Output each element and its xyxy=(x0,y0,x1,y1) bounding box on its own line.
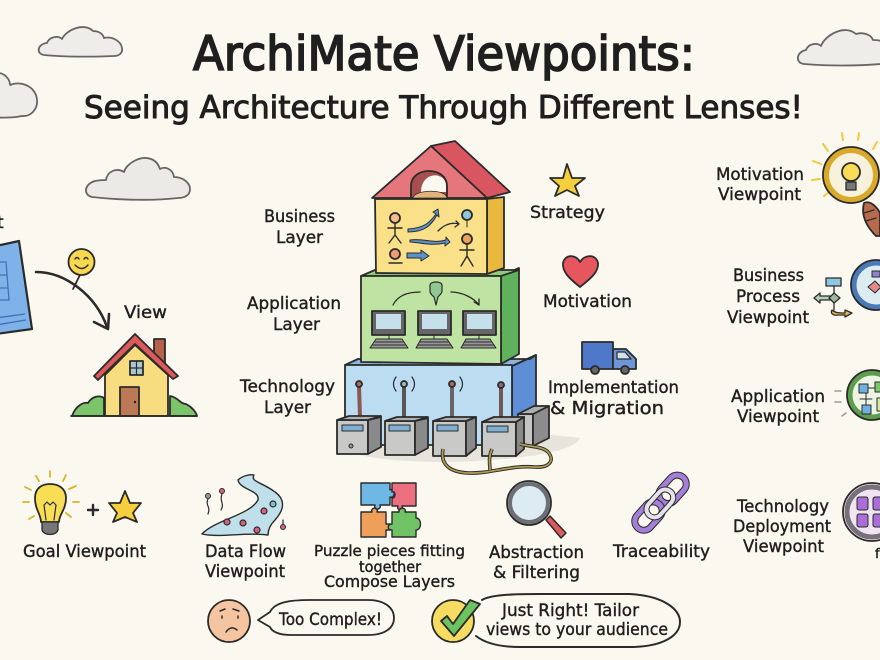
icon: blueprint xyxy=(0,241,32,334)
icon: strategy star xyxy=(550,164,585,196)
business layer diagram xyxy=(388,209,474,266)
cloud: top left xyxy=(39,27,122,57)
callout: Too Complex: Too Complex! xyxy=(278,610,382,630)
label: Technology Deployment Viewpoint: Viewpoint xyxy=(743,537,824,557)
label: Technology Layer: Technology xyxy=(239,377,335,397)
icon: check mark xyxy=(432,600,480,642)
icon: house xyxy=(71,334,197,416)
label: Technology Deployment Viewpoint: Technology xyxy=(736,497,829,517)
label: Application Layer xyxy=(247,294,341,335)
label: Puzzle pieces fitting together Compose Layers: together xyxy=(359,558,422,576)
icon: chain links xyxy=(631,471,690,534)
technology layer block xyxy=(345,355,536,445)
clipped label at right edge: f xyxy=(875,547,880,562)
roof xyxy=(372,141,510,198)
label: Implementation & Migration xyxy=(548,378,679,419)
icon: motivation lens with bulb xyxy=(812,133,880,236)
label: Business Process Viewpoint: Viewpoint xyxy=(727,308,809,328)
label: View: View xyxy=(124,303,167,323)
cloud: middle left xyxy=(86,158,190,200)
title: ArchiMate Viewpoints: xyxy=(193,27,695,82)
label: Technology Deployment Viewpoint: Deployment xyxy=(733,517,831,537)
application layer diagram xyxy=(393,282,479,305)
icon: motivation heart xyxy=(563,256,598,287)
label: Application Viewpoint xyxy=(731,387,825,427)
panel: layered architecture stack xyxy=(335,141,580,473)
callout: Too Complex xyxy=(258,600,394,635)
label: Motivation Viewpoint: Motivation xyxy=(716,165,804,185)
label: Data Flow Viewpoint xyxy=(205,542,286,582)
icon: delivery truck xyxy=(582,342,636,374)
callout: Just Right: Just Right! Tailor xyxy=(501,601,639,621)
label: Technology Layer: Layer xyxy=(264,398,311,418)
label: Business Process Viewpoint: Process xyxy=(736,287,800,307)
label: Puzzle pieces fitting together Compose Layers: Puzzle pieces fitting xyxy=(314,542,465,560)
application layer block xyxy=(361,268,519,364)
icon: worried face xyxy=(208,600,250,642)
label: Motivation: Motivation xyxy=(543,292,632,312)
label: Application Layer: Layer xyxy=(273,315,320,335)
title xyxy=(84,27,803,126)
label: Business Layer: Layer xyxy=(276,228,323,248)
callout: Just Right: views to your audience xyxy=(486,620,668,640)
icon: goal bulb xyxy=(23,471,79,534)
label: Business Process Viewpoint: Business xyxy=(733,266,804,286)
label: Implementation & Migration: Implementation xyxy=(548,378,679,398)
callout: Just Right xyxy=(476,594,680,647)
label: Strategy: Strategy xyxy=(530,203,605,223)
icon: data flow river xyxy=(202,475,286,535)
cloud: top right xyxy=(798,30,880,66)
antennas xyxy=(356,377,504,420)
servers xyxy=(337,406,549,456)
label: Abstraction & Filtering xyxy=(489,543,584,583)
label: Data Flow Viewpoint: Data Flow xyxy=(205,542,286,562)
label: Application Layer: Application xyxy=(247,294,341,314)
label: Puzzle pieces fitting together Compose Layers: Compose Layers xyxy=(324,572,455,591)
icon: goal star xyxy=(109,491,141,522)
label: Traceability: Traceability xyxy=(612,542,710,562)
icon: business process flow xyxy=(814,278,852,317)
label: Implementation & Migration: & Migration xyxy=(550,398,664,419)
title: Seeing Architecture Through Different Lenses! xyxy=(84,90,803,126)
label: Business Process Viewpoint xyxy=(727,266,809,328)
icon: business process lens xyxy=(851,260,880,310)
icon: smiley xyxy=(68,249,94,289)
icon: plus xyxy=(88,505,98,515)
label: Abstraction & Filtering: & Filtering xyxy=(493,563,580,583)
label: Business Layer xyxy=(264,207,335,248)
label: Application Viewpoint: Viewpoint xyxy=(737,407,819,427)
label: Technology Layer xyxy=(239,377,335,418)
label: Data Flow Viewpoint: Viewpoint xyxy=(205,562,285,582)
computers xyxy=(370,311,496,348)
arrow: blueprint to view xyxy=(36,272,109,329)
icon: technology lens xyxy=(843,483,880,541)
icon: puzzle pieces xyxy=(361,483,420,537)
label: Goal Viewpoint: Goal Viewpoint xyxy=(23,542,146,562)
label: Technology Deployment Viewpoint xyxy=(733,497,831,557)
cloud: far left xyxy=(0,73,37,118)
label: Business Layer: Business xyxy=(264,207,335,227)
label: Motivation Viewpoint xyxy=(716,165,804,205)
label: Puzzle pieces fitting together Compose Layers xyxy=(314,542,465,591)
business layer block xyxy=(375,197,504,274)
ground shadow xyxy=(335,433,580,462)
cables xyxy=(442,444,551,473)
label: Motivation Viewpoint: Viewpoint xyxy=(718,185,801,205)
label: Abstraction & Filtering: Abstraction xyxy=(489,543,584,563)
label: Application Viewpoint: Application xyxy=(731,387,825,407)
icon: application lens xyxy=(835,370,880,420)
icon: magnifier xyxy=(507,481,566,538)
